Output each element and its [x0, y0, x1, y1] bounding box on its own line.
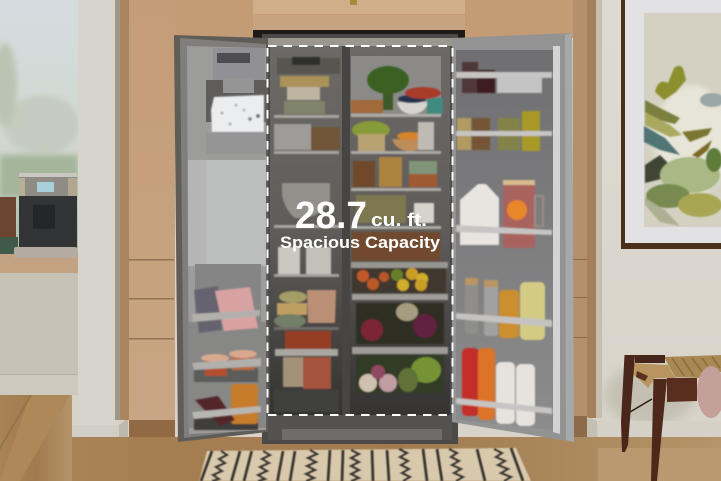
- wood cabinets left of fridge: [120, 0, 175, 437]
- capacity callout: [280, 195, 441, 252]
- wood cabinets above fridge: [175, 0, 575, 38]
- capacity unit: cu. ft.: [371, 209, 427, 230]
- left compartment shelves and food: [274, 57, 340, 412]
- framed botanical artwork: [621, 0, 721, 249]
- ice bin: [211, 95, 264, 132]
- top door shelf: [462, 62, 478, 93]
- capacity value: 28.7: [295, 195, 367, 237]
- counter and lower cabinet: [0, 254, 78, 395]
- coffee jar on counter: [0, 197, 18, 254]
- striped rug: [199, 448, 531, 481]
- right compartment shelves and food: [351, 66, 448, 393]
- wood cabinets right of fridge: [573, 0, 596, 446]
- wall on the right: [587, 0, 721, 448]
- refrigerator cabinet body: [262, 34, 458, 444]
- dashed capacity outline: [268, 46, 452, 415]
- milk jug and pitcher: [460, 184, 499, 245]
- middle door shelf: [457, 118, 471, 150]
- left door with ice and water dispenser: [174, 35, 268, 442]
- floor: [0, 395, 721, 481]
- capacity caption: Spacious Capacity: [280, 233, 441, 252]
- icon: coffee machine: [14, 173, 77, 258]
- left door bins with food: [192, 286, 261, 430]
- bench with woven seat: [621, 355, 721, 481]
- glass bottles: [465, 280, 478, 334]
- right door with bins and bottles: [452, 33, 574, 442]
- window with outdoor view: [0, 0, 80, 260]
- juice and milk bottles: [462, 348, 479, 416]
- white pillar: [72, 0, 128, 453]
